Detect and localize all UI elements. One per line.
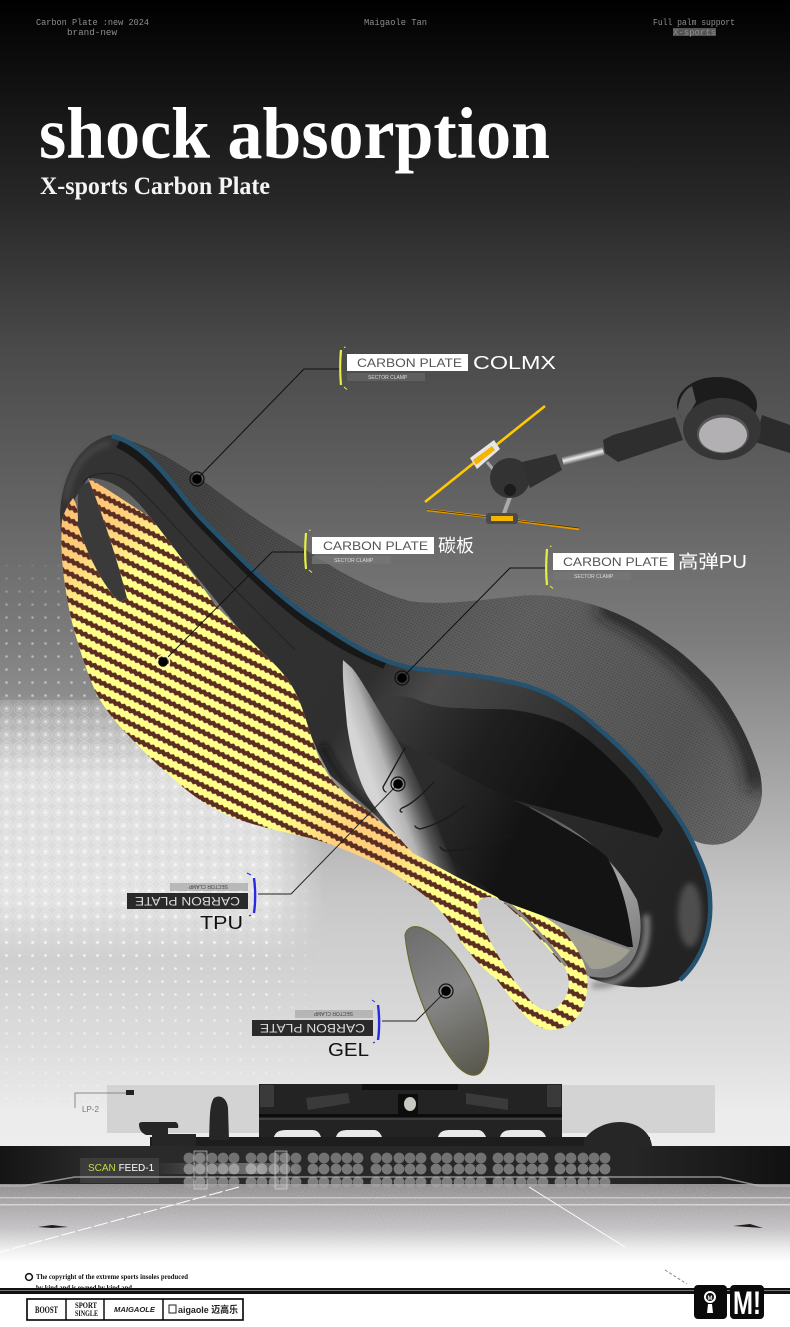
brand badge: M!: M!	[733, 1285, 761, 1321]
callout: GEL	[252, 984, 453, 1060]
header text: top left: brand-new	[67, 28, 118, 38]
copyright note	[26, 1273, 188, 1292]
header text: top left: Carbon Plate :new 2024	[36, 18, 149, 28]
footer logo strip: aigaole 迈高乐	[178, 1304, 238, 1316]
gel pad	[405, 927, 489, 1075]
callout: carbon plate	[156, 530, 474, 668]
footer logo strip: MAIGAOLE	[114, 1305, 156, 1314]
arch dark zone	[373, 696, 663, 838]
callout: high-rebound PU: 高弹PU	[678, 552, 747, 572]
dashed scan rays	[0, 1187, 687, 1284]
lower floor gradient	[0, 1184, 790, 1327]
blue seam	[112, 436, 710, 980]
insole sole body	[60, 435, 710, 987]
subtitle: X-sports Carbon Plate	[40, 173, 270, 200]
heel teardrop recess	[78, 482, 127, 602]
callout: COLMX: COLMX	[473, 353, 556, 373]
insole foam top layer (mesh)	[112, 436, 762, 845]
callout: carbon plate: 碳板	[438, 536, 474, 556]
machine body	[150, 1084, 650, 1146]
TPU stitch marks	[383, 748, 510, 851]
forefoot black wedge	[397, 740, 633, 947]
copyright note: by kind and is owned by kind and	[36, 1284, 132, 1292]
footer logo strip: SINGLE	[75, 1309, 98, 1318]
sole inner contour line	[83, 473, 295, 650]
ring glow	[592, 915, 647, 985]
machine left clamps	[139, 1096, 229, 1146]
callout: TPU	[127, 777, 405, 933]
header text: top centre: Maigaole Tan	[364, 18, 427, 28]
LP-2 tag	[75, 1090, 134, 1114]
callout: GEL: CARBON PLATE	[260, 1021, 365, 1033]
header text: top right: Full palm support	[653, 18, 735, 28]
header text: top left	[36, 18, 149, 38]
callout: high-rebound PU: CARBON PLATE	[563, 557, 668, 569]
callout: high-rebound PU: SECTOR CLAMP	[574, 574, 614, 580]
scan bar	[0, 1146, 790, 1184]
callout: GEL: GEL	[328, 1040, 369, 1060]
footer logo strip	[27, 1299, 243, 1320]
callout: COLMX: CARBON PLATE	[357, 358, 462, 370]
silver sliver by the window	[502, 899, 566, 966]
callout: TPU: TPU	[200, 913, 243, 933]
scan dot matrix	[150, 1151, 610, 1189]
glass plate outline	[0, 1177, 790, 1186]
sole black edge band	[118, 444, 385, 665]
LP-2 tag: LP-2	[82, 1105, 99, 1114]
carbon plate	[61, 478, 588, 1030]
scan machine backing panel	[107, 1085, 715, 1133]
halftone dot texture	[0, 564, 316, 1074]
machine right clamp	[584, 1122, 652, 1146]
callout: TPU: CARBON PLATE	[135, 894, 240, 906]
brand badge: figure	[694, 1285, 727, 1319]
robotic arm with yellow clamps	[425, 377, 790, 529]
heel rim highlight	[66, 443, 110, 500]
footer logo strip: SPORT	[75, 1301, 98, 1310]
footer logo strip: BOOST	[35, 1305, 58, 1315]
SCAN FEED-1 label	[80, 1158, 159, 1183]
copyright note: The copyright of the extreme sports insoles produced	[36, 1273, 188, 1281]
callout: COLMX	[190, 347, 556, 486]
callout: high-rebound PU	[395, 546, 747, 685]
title: shock absorption	[39, 93, 550, 174]
callout: carbon plate: CARBON PLATE	[323, 541, 428, 553]
brand badge: figure: M	[708, 1296, 712, 1302]
midfoot flap (TPU)	[343, 660, 497, 897]
shadow beside the flap	[322, 745, 375, 812]
heel window patch	[563, 927, 630, 969]
floor markers	[38, 1224, 763, 1228]
footer rule	[0, 1288, 790, 1294]
SCAN FEED-1 label: SCAN FEED-1	[88, 1163, 155, 1174]
callout: carbon plate: SECTOR CLAMP	[334, 558, 374, 564]
callout: GEL: SECTOR CLAMP	[313, 1010, 353, 1016]
callout: TPU: SECTOR CLAMP	[188, 883, 228, 889]
header text: top right	[653, 18, 735, 38]
inner heel ring	[497, 807, 641, 978]
header text: top right: X-sports	[673, 28, 716, 38]
forefoot highlight	[678, 883, 702, 947]
callout: COLMX: SECTOR CLAMP	[368, 375, 408, 381]
